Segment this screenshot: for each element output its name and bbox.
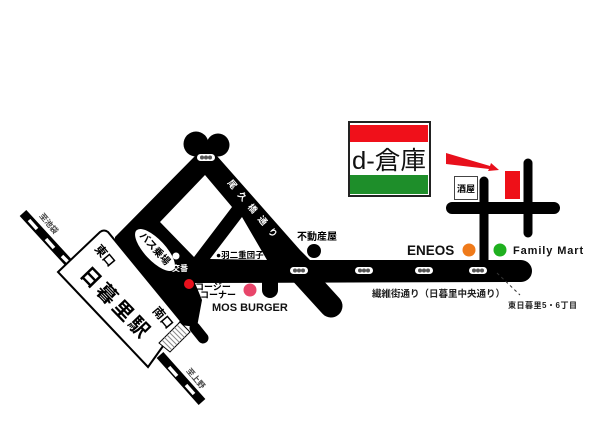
d-souko location [505,171,520,199]
pointer line to address [497,273,520,295]
south exit label: 南口 [150,304,176,331]
police box: 交番 [172,263,188,273]
address label: 東日暮里5・6丁目 [508,300,577,310]
Cozy Corner dot [184,279,194,289]
road network [115,132,532,338]
train marks on roads [197,154,487,274]
Mos Burger label: MOS BURGER [212,302,288,314]
station stairs [159,322,190,352]
direction label: Ikebukuro: 至池袋 [37,211,61,236]
road name: Seni-gai dori: 繊維街通り（日暮里中央通り） [372,288,505,300]
railway south to Ueno [160,355,202,402]
road name: Oku-bashi dori: 尾久橋通り [225,177,280,239]
Family Mart: Family Mart [513,245,584,257]
Mos Burger marker [244,284,256,296]
Cozy Corner label: コージー [195,282,231,292]
sake shop: 酒屋 [457,184,475,194]
station building [58,230,181,367]
railway north to Ikebukuro [23,213,68,262]
direction label: Ueno: 至上野 [184,366,208,391]
east exit label: 東口 [92,241,119,269]
side streets near d-souko [452,163,554,265]
d-souko logo: d-倉庫 [352,147,426,175]
police box [172,252,188,273]
station name: 日暮里駅 [75,262,156,345]
Cozy Corner label: コーナー [200,290,236,300]
Family Mart [494,244,584,257]
red arrow [446,153,499,171]
bus terminal [129,223,181,277]
sake shop [454,176,478,200]
bus terminal: バス乗場 [137,229,173,268]
real estate agent: 不動産屋 [297,230,337,243]
Cozy Corner label [195,282,236,300]
d-souko logo [349,122,430,196]
ENEOS [407,243,476,258]
real estate agent [297,230,337,258]
Habutae dango: ●羽二重団子 [216,250,264,260]
ENEOS: ENEOS [407,243,454,258]
